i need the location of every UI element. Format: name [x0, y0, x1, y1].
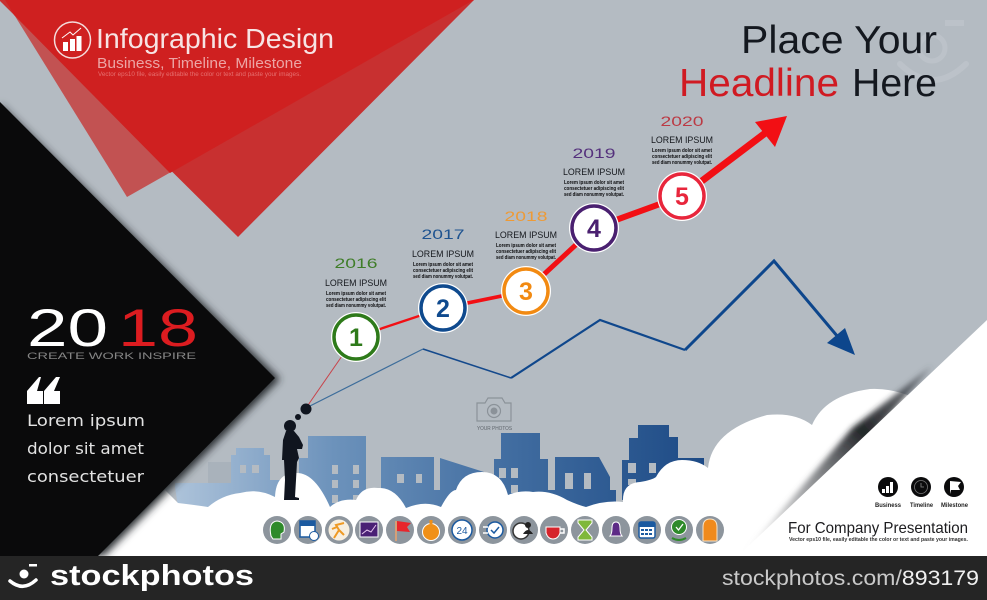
- icon: hourglass: [571, 516, 599, 544]
- icon: timeline clock: [911, 477, 931, 497]
- icon row: 15 round business icons: [263, 516, 724, 544]
- milestone 2: 2017: consectetuer adipiscing elit: [413, 268, 473, 274]
- quote text: consectetuer: [27, 467, 144, 486]
- icon: 24 hours: 24: [456, 526, 468, 537]
- icon: milestone flag: [944, 477, 964, 497]
- panel: white corner: [738, 320, 987, 556]
- milestone 5: 2020: [651, 113, 713, 221]
- milestone 4: 2019: Lorem ipsum dolor sit amet: [564, 180, 624, 186]
- milestone 5: 2020: 2020: [660, 113, 704, 129]
- icon: quotation marks: [27, 377, 60, 404]
- milestone 2: 2017: Lorem ipsum dolor sit amet: [413, 262, 473, 268]
- panel shadow: white corner fold: [745, 366, 932, 553]
- icon: headline watermark smile: [900, 20, 966, 80]
- milestone 2: 2017: 2: [436, 295, 450, 323]
- icon: speed check: [479, 516, 507, 544]
- icon: runner: [325, 516, 353, 544]
- small description: Vector eps10 file, easily editable the color or text and paste your images.: [98, 71, 301, 78]
- icon: bell: [602, 516, 630, 544]
- milestone 3: 2018: Lorem ipsum dolor sit amet: [496, 243, 556, 249]
- milestone 1: 2016: 1: [349, 324, 363, 352]
- milestone 1: 2016: sed diam nonummy volutpat.: [326, 303, 386, 309]
- milestone 3: 2018: LOREM IPSUM: [495, 230, 557, 240]
- milestone 3: 2018: consectetuer adipiscing elit: [496, 249, 556, 255]
- icon: location check: [665, 516, 693, 544]
- milestone 5: 2020: consectetuer adipiscing elit: [652, 154, 712, 160]
- company presentation caption: For Company Presentation: [788, 520, 968, 537]
- icon: stockphotos logo: [10, 564, 37, 586]
- quote text: dolor sit amet: [27, 439, 144, 458]
- icon: calendar clock: [294, 516, 322, 544]
- quote text: [27, 411, 145, 486]
- white cloud band: [98, 389, 987, 556]
- subheading: Business, Timeline, Milestone: [97, 55, 302, 72]
- panel: red overlapping triangles: [0, 0, 474, 237]
- bottom right badges: Milestone: [941, 502, 968, 509]
- milestone 4: 2019: 4: [587, 215, 601, 243]
- heading: Infographic Design: Infographic Design: [96, 23, 334, 54]
- milestone 5: 2020: LOREM IPSUM: [651, 135, 713, 145]
- red timeline line with arrow: [306, 116, 787, 408]
- panel shadow: black panel: [0, 104, 280, 556]
- quote text: Lorem ipsum: [27, 411, 145, 430]
- headline: Headline: [679, 62, 839, 105]
- bottom right badges: Business: [875, 502, 901, 509]
- footer bar: [0, 556, 987, 600]
- milestone 4: 2019: consectetuer adipiscing elit: [564, 186, 624, 192]
- milestone 2: 2017: 2017: [422, 226, 465, 242]
- headline: [679, 19, 937, 105]
- milestone 3: 2018: 2018: [504, 208, 548, 224]
- milestone 5: 2020: Lorem ipsum dolor sit amet: [652, 148, 712, 154]
- icon: purple chart: [355, 516, 383, 544]
- milestone 2: 2017: LOREM IPSUM: [412, 249, 474, 259]
- icon: red flag: [386, 516, 414, 544]
- icon: camera placeholder: [477, 398, 513, 432]
- year block: [27, 299, 198, 362]
- milestone 4: 2019: 2019: [572, 145, 616, 161]
- stock image id: stockphotos.com/ 893179: [722, 567, 979, 590]
- milestone 1: 2016: [325, 255, 387, 362]
- milestone 2: 2017: sed diam nonummy volutpat.: [413, 274, 473, 280]
- icon: 24 hours: [448, 516, 476, 544]
- milestone 4: 2019: LOREM IPSUM: [563, 167, 625, 177]
- icon: growth chart in circle: [54, 22, 90, 58]
- milestone 3: 2018: 3: [519, 278, 533, 306]
- milestone 3: 2018: sed diam nonummy volutpat.: [496, 255, 556, 261]
- milestone 5: 2020: sed diam nonummy volutpat.: [652, 160, 712, 166]
- milestone 5: 2020: 5: [675, 183, 689, 211]
- panel: black quote panel: [0, 102, 275, 556]
- milestone 1: 2016: LOREM IPSUM: [325, 278, 387, 288]
- milestone 2: 2017: [412, 226, 474, 333]
- milestone 1: 2016: 2016: [334, 255, 378, 271]
- year block: 20: [27, 299, 108, 358]
- blue trend line with arrow: [306, 261, 855, 408]
- city skyline: [175, 425, 704, 508]
- icon: green head: [263, 516, 291, 544]
- year block: 18: [118, 299, 198, 358]
- bottom right badges: [875, 477, 968, 509]
- icon: coffee cup: [540, 516, 568, 544]
- icon: calendar: [633, 516, 661, 544]
- icon: thinking businessman silhouette: [282, 404, 312, 500]
- bottom right badges: Timeline: [910, 502, 933, 509]
- icon: business bars: [878, 477, 898, 497]
- milestone 4: 2019: [563, 145, 625, 253]
- milestone 3: 2018: [495, 208, 557, 316]
- milestone 4: 2019: sed diam nonummy volutpat.: [564, 192, 624, 198]
- company presentation caption: Vector eps10 file, easily editable the color or text and paste your images.: [789, 537, 968, 543]
- icon: orange medal: [417, 516, 445, 544]
- wordmark: stockphotos: [50, 560, 254, 592]
- icon: camera placeholder: YOUR PHOTOS: [477, 426, 513, 432]
- icon: person clock: [510, 516, 538, 544]
- icon: orange door: [696, 516, 724, 544]
- title block: [54, 22, 334, 78]
- headline: Place Your: [741, 19, 937, 62]
- milestone 1: 2016: consectetuer adipiscing elit: [326, 297, 386, 303]
- milestone 1: 2016: Lorem ipsum dolor sit amet: [326, 291, 386, 297]
- year block: CREATE WORK INSPIRE: [27, 351, 196, 362]
- headline: Here: [852, 62, 937, 105]
